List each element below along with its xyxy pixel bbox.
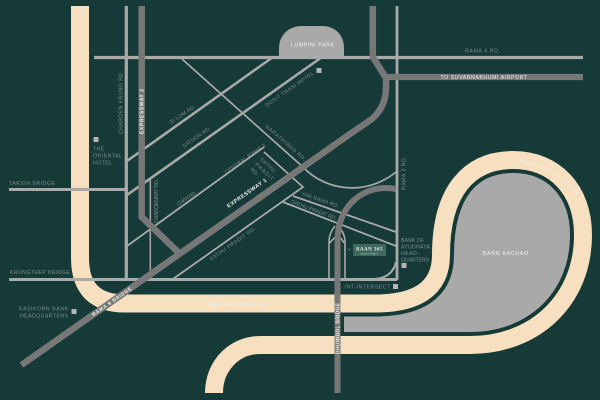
label: Sathu Pradit Rd short (249, 157, 280, 188)
label: Chan Rd: CHAN RD. (176, 190, 198, 208)
label: The Oriental Hotel (93, 146, 122, 166)
island: Bang Kachao (344, 160, 583, 345)
label: Charoen Krung Rd: CHAROEN KRUNG RD. (118, 71, 124, 134)
label: Int-Intersect: INT-INTERSECT (345, 284, 391, 290)
label: To Suvarnabhumi Airport: TO SUVARNABHUMI AIRPORT (440, 75, 528, 81)
label: Bang Kachao: BANG KACHAO (483, 251, 528, 257)
label: Kasikorn Bank Headquarters: HEADQUARTERS (20, 314, 69, 320)
Lumpini Park (279, 26, 344, 57)
river margin (344, 160, 583, 345)
label: Sathu Pradit Rd short: RD. (249, 167, 259, 178)
marker: The Oriental Hotel (94, 137, 98, 142)
label: The Oriental Hotel: THE (93, 146, 105, 152)
label: Kasikorn Bank Headquarters: KASIKORN BANK (19, 306, 69, 312)
label: Kasikorn Bank Headquarters (19, 306, 69, 320)
label: Sathu Pradit Rd short: PRADIT (253, 162, 275, 183)
label: Bhumibol Bridge: BHUMIBOL BRIDGE (336, 302, 342, 354)
project marker: Baan 365: SATHU PRADIT (360, 252, 379, 255)
marker: Kasikorn Bank (72, 309, 76, 314)
label: Central Rama 3: CENTRAL RAMA 3 (224, 143, 267, 176)
label: Rama 3 Rd: RAMA 3 RD. (402, 156, 408, 190)
label: Sathon Rd: SATHON RD. (182, 126, 212, 150)
label: Expressway 1: EXPRESSWAY 1 (226, 178, 268, 210)
label: Sathu Pradit Rd lower: SATHU PRADIT RD. (209, 226, 257, 263)
label: The Oriental Hotel: HOTEL (93, 160, 112, 166)
minor roads (9, 6, 583, 280)
label: Bank of Ayudhaya Headquarters: HEAD- (401, 251, 419, 257)
label: Sathu Pradit Rd upper: SATHU PRADIT RD. (290, 199, 337, 222)
label: Krungthep Bridge: KRUNGTHEP BRIDGE (10, 270, 71, 276)
label: Dusit Thani Hotel: DUSIT THANI HOTEL (265, 71, 315, 109)
marker: Bank of Ayudhaya (402, 263, 406, 268)
label: Taksin Bridge: TAKSIN BRIDGE (9, 181, 56, 187)
project marker: Baan 365 (348, 244, 386, 256)
label: Rama 9 Bridge: RAMA 9 BRIDGE (91, 286, 134, 318)
curve guide for river label (517, 162, 578, 197)
label: Chao Phraya River curved: CHAO PHRAYA RIVER (518, 159, 578, 195)
label: The Oriental Hotel: ORIENTAL (93, 154, 122, 160)
label: Narathiwas Rd: NARATHIWAS RD. (264, 124, 307, 163)
marker: Int-Intersect (393, 284, 398, 289)
label: Yan Nawa Rd: YAN NAWA RD. (300, 191, 339, 210)
label: Charoenrat Rd: CHAROENRAT RD. (154, 179, 160, 223)
label: Bank of Ayudhaya Headquarters: AYUDHAYA (401, 244, 431, 250)
label: Bank of Ayudhaya Headquarters (401, 238, 431, 264)
label: Lumpini Park: LUMPINI PARK (291, 42, 335, 48)
project marker: Baan 365: BAAN 365 (356, 248, 383, 252)
label: Rama 4 Rd: RAMA 4 RD. (465, 48, 500, 54)
label: Sathu Pradit Rd short: SATHU (258, 157, 276, 174)
marker: Dusit Thani Hotel (316, 68, 322, 73)
label: Chao Phraya River straight: CHAO PHRAYA RIVER (205, 302, 268, 308)
label: Bank of Ayudhaya Headquarters: QUARTERS (401, 258, 430, 264)
label: Expressway 2: EXPRESSWAY 2 (140, 89, 146, 134)
label: Si Lom Rd: SI LOM RD. (169, 104, 197, 126)
label: Bank of Ayudhaya Headquarters: BANK OF (401, 238, 424, 244)
